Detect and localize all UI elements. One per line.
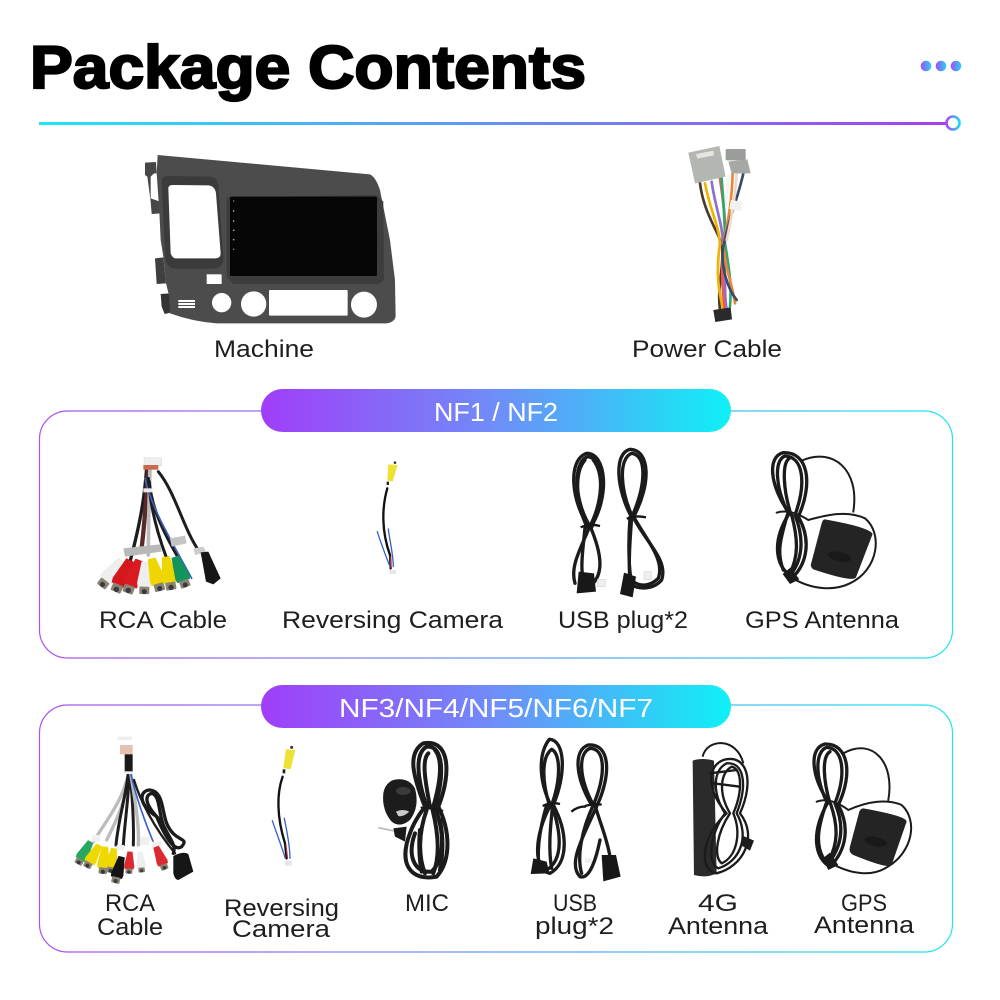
label: machine: Machine [214, 336, 314, 363]
label: 4G antenna: 4G [698, 890, 738, 917]
item: USB plug x2 [574, 449, 663, 597]
product: machine [145, 155, 396, 323]
label: GPS antenna, second panel: Antenna [814, 912, 914, 939]
label: MIC: MIC [405, 890, 449, 917]
pill heading: NF1 / NF2: NF1 / NF2 [434, 397, 558, 427]
pill heading: NF3/NF4/NF5/NF6/NF7 [261, 685, 731, 728]
label: reversing camera: Reversing Camera [282, 607, 503, 634]
label: RCA cable, second panel: Cable [97, 914, 163, 941]
label: GPS antenna: GPS Antenna [745, 607, 899, 634]
label: USB plug x2, second panel: USB [553, 890, 597, 917]
item: 4G antenna [693, 743, 754, 876]
pill heading: NF3/NF4/NF5/NF6/NF7: NF3/NF4/NF5/NF6/NF7 [339, 693, 653, 723]
item: GPS antenna, second panel [814, 744, 911, 873]
product: power cable [688, 146, 751, 322]
panel: NF3/NF4/NF5/NF6/NF7 [40, 685, 952, 952]
item: reversing camera [377, 461, 398, 574]
label: reversing camera, second panel: Camera [232, 916, 330, 943]
pill heading: NF1 / NF2 [261, 389, 731, 432]
label: USB plug x2, second panel: plug*2 [535, 913, 614, 940]
label: RCA cable, second panel: RCA [105, 890, 156, 917]
label: RCA cable: RCA Cable [99, 607, 227, 634]
item: GPS antenna [773, 453, 876, 588]
panel: NF1 / NF2 [40, 389, 952, 658]
label: power cable: Power Cable [632, 336, 782, 363]
header rule with end ring [39, 116, 960, 130]
item: MIC [378, 743, 447, 877]
item: RCA cable [95, 458, 221, 596]
label: USB plug x2, second panel [535, 890, 614, 940]
label: RCA cable, second panel [97, 890, 163, 941]
label: reversing camera, second panel [224, 895, 339, 943]
label: GPS antenna, second panel: GPS [841, 890, 887, 917]
item: USB plug x2, second panel [531, 739, 621, 881]
label: reversing camera, second panel: Reversing [224, 895, 339, 922]
item: RCA cable with USB [72, 737, 193, 885]
icon: three dots [921, 61, 961, 71]
item: reversing camera, second panel [272, 746, 295, 866]
label: 4G antenna [668, 890, 768, 940]
label: 4G antenna: Antenna [668, 913, 768, 940]
title: Package Contents [30, 34, 586, 101]
label: GPS antenna, second panel [814, 890, 914, 939]
label: USB plug x2: USB plug*2 [558, 607, 688, 634]
